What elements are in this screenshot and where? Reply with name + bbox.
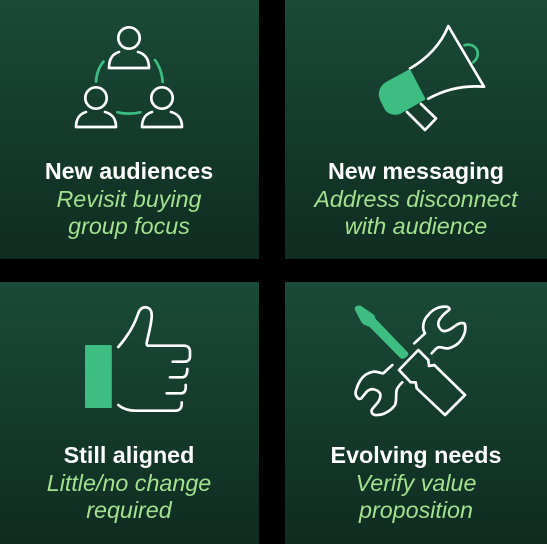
panel: evolving needs — [285, 282, 547, 544]
icon: thumbs up — [85, 307, 190, 411]
heading: new messaging: New messaging — [328, 158, 504, 184]
text: little or no change required: required — [86, 497, 172, 523]
text: revisit buying group focus — [56, 186, 202, 239]
text: verify value proposition: proposition — [359, 497, 473, 523]
text: address disconnect with audience: Address disconnect — [314, 186, 518, 212]
panel: new messaging — [285, 0, 547, 259]
text: little or no change required: Little/no change — [47, 470, 211, 496]
icon: screwdriver and wrench — [355, 305, 465, 415]
text: little or no change required — [47, 470, 211, 523]
heading: evolving needs: Evolving needs — [331, 442, 501, 468]
text: revisit buying group focus: group focus — [68, 213, 190, 239]
text: address disconnect with audience — [313, 186, 518, 239]
text: verify value proposition: Verify value — [356, 470, 476, 496]
icon: megaphone — [379, 26, 484, 130]
heading: still aligned: Still aligned — [64, 442, 194, 468]
text: revisit buying group focus: Revisit buying — [56, 186, 202, 212]
text: address disconnect with audience: with audience — [345, 213, 487, 239]
panel: still aligned — [0, 282, 259, 544]
panel: new audiences — [0, 0, 259, 259]
icon: three connected people — [76, 27, 182, 127]
heading: new audiences: New audiences — [45, 158, 213, 184]
text: verify value proposition — [356, 470, 476, 523]
